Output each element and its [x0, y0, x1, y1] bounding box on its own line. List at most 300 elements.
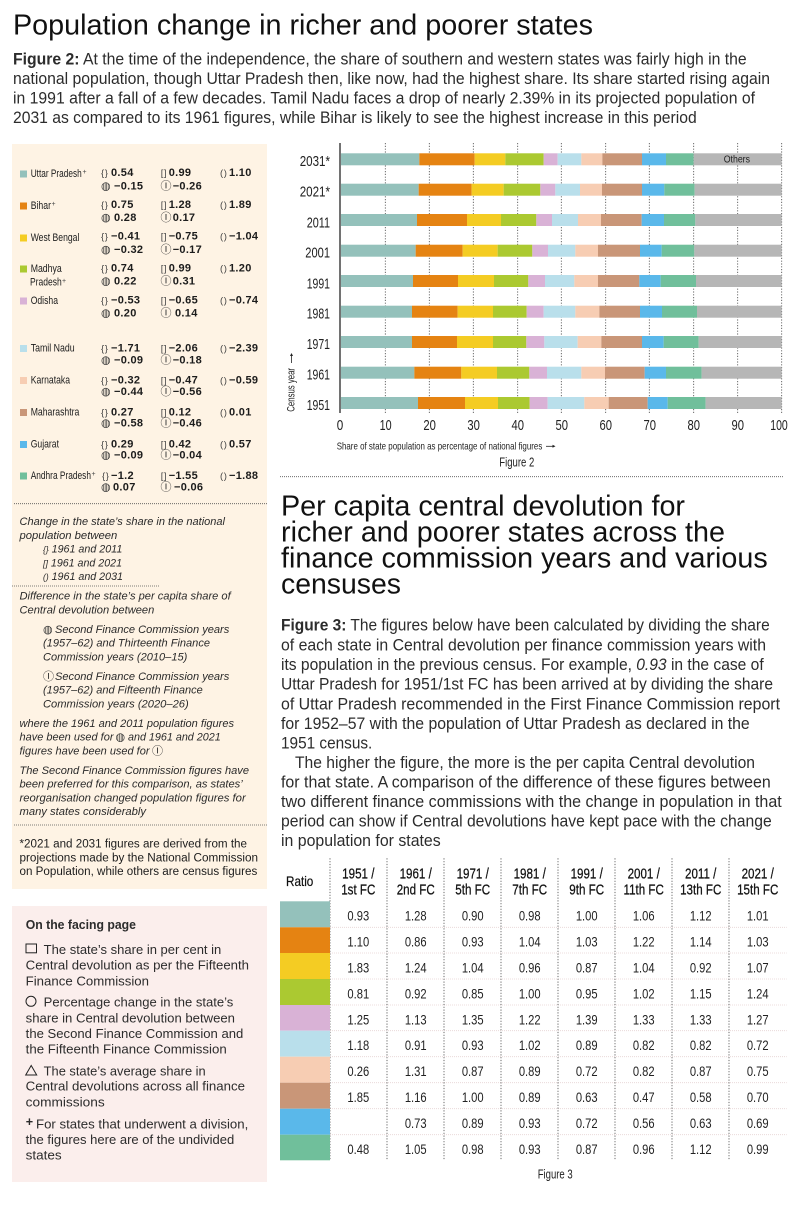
bar: 2001: [341, 245, 782, 257]
legend row: Tamil Nadu: Tamil Nadu: [31, 342, 75, 354]
legend row: Odisha: Odisha: [31, 295, 59, 307]
note: difference in per capita share: been preferred for this comparison, as states’: [20, 779, 243, 791]
column: 2011 / 13th FC: 0.63: [690, 1116, 712, 1131]
column: 2011 / 13th FC: [680, 865, 721, 1157]
note: difference in per capita share: reorganisation changed population figures for: [20, 792, 247, 804]
x axis numbers: 80: [687, 417, 700, 434]
panel: on the facing page: [12, 906, 267, 1182]
legend row: Gujarat: ◍: [101, 448, 111, 461]
legend row: Gujarat: −0.09: [114, 449, 143, 461]
column: 1961 / 2nd FC: 1.31: [405, 1064, 427, 1079]
legend row: Andhra Pradesh: Andhra Pradesh: [31, 470, 91, 482]
column: 2011 / 13th FC: 1.15: [690, 986, 712, 1002]
legend row: Karnataka: (): [220, 376, 228, 387]
column: 2021 / 15th FC: 0.72: [747, 1038, 769, 1054]
legend row: Maharashtra: 0.27: [111, 406, 134, 418]
legend row: Gujarat: [20, 438, 252, 461]
text block: figure 3 description: for that state. A comparison of the difference of these figures between: [281, 774, 771, 792]
legend row: West Bengal: (): [220, 232, 228, 243]
column: 1981 / 7th FC: 1.02: [519, 1038, 541, 1054]
column: 1991 / 9th FC: 0.63: [576, 1090, 598, 1105]
legend row: Gujarat: 0.29: [111, 438, 134, 450]
text block: figure 3 description: for 1952–57 with the population of Uttar Pradesh as declared in the: [281, 715, 750, 733]
y axis title with arrow: Census year: [286, 368, 298, 412]
colour swatches: [280, 901, 330, 1160]
text block: figure 3 description: in population for states: [281, 832, 441, 850]
bar: 1971: [341, 336, 782, 348]
year labels: 2001: [305, 245, 330, 262]
column: 1971 / 5th FC: 0.87: [462, 1064, 484, 1079]
column: 1971 / 5th FC: 1.00: [462, 1090, 484, 1105]
year labels: 1991: [307, 275, 330, 292]
text: average share: [26, 1064, 245, 1110]
column: 1991 / 9th FC: 0.95: [576, 986, 598, 1002]
legend row: Tamil Nadu: ◍: [101, 353, 111, 366]
column: 2011 / 13th FC: 1.33: [690, 1012, 712, 1028]
column: 1971 / 5th FC: 0.89: [462, 1116, 484, 1131]
text: share in devolution: The state’s share in per cent in: [44, 943, 221, 957]
text: undivided states: states: [26, 1148, 62, 1162]
column: 2021 / 15th FC: 0.75: [747, 1064, 769, 1079]
legend row: Karnataka: −0.47: [169, 375, 198, 387]
column: 1951 / 1st FC: 1st FC: [341, 881, 375, 898]
legend row: Andhra Pradesh: −1.2: [111, 470, 134, 482]
note: difference in per capita share: many states considerably: [20, 806, 147, 818]
legend row: Karnataka: [20, 374, 258, 398]
legend row: Uttar Pradesh: 1.10: [229, 167, 252, 179]
text block: figure 3 description: The higher the figure, the more is the per capita Central devolution: [295, 754, 755, 772]
legend row: Gujarat: 0.42: [169, 438, 191, 450]
column: 1971 / 5th FC: 1.04: [462, 960, 484, 976]
column: 1951 / 1st FC: 0.81: [347, 986, 369, 1002]
bar: 1951: [341, 397, 782, 409]
text: percentage change: the Fifteenth Finance Commission: [26, 1043, 227, 1057]
legend row: Tamil Nadu: {}: [101, 344, 109, 355]
legend row: Andhra Pradesh: {}: [102, 471, 110, 482]
column: 1951 / 1st FC: 1.18: [347, 1038, 369, 1054]
axis line: [339, 143, 341, 413]
title: population change: Population change in richer and poorer states: [13, 10, 593, 42]
legend row: Uttar Pradesh: 0.54: [111, 167, 134, 179]
column: 2021 / 15th FC: 0.70: [747, 1090, 769, 1105]
legend row: Gujarat: {}: [101, 439, 109, 450]
column: 1961 / 2nd FC: 0.73: [405, 1116, 427, 1131]
column: 2021 / 15th FC: 0.99: [747, 1142, 769, 1157]
column: 2001 / 11th FC: 0.96: [633, 1142, 655, 1157]
column: 2021 / 15th FC: 1.27: [747, 1012, 769, 1028]
x axis numbers: [337, 417, 788, 434]
text: percentage change: the Second Finance Commission and: [26, 1027, 243, 1041]
legend row: Madhya Pradesh: Pradesh: [30, 276, 62, 288]
note: difference in per capita share: Ⓘ: [152, 744, 163, 757]
text: undivided states: the figures here are of the undivided: [26, 1133, 234, 1147]
table: ratio by finance commission: [280, 858, 787, 1161]
legend row: Karnataka: −0.44: [114, 386, 144, 398]
legend row: West Bengal: −0.75: [169, 231, 198, 243]
legend row: Andhra Pradesh: []: [161, 471, 167, 482]
text block: figure 2 description: in 1991 after a fall of a few decades. Tamil Nadu faces a drop of nearly 2.39% in its projected population of: [13, 90, 755, 108]
legend row: Andhra Pradesh: [20, 470, 258, 493]
legend row: Madhya Pradesh: ◍: [101, 275, 111, 288]
legend row: Bihar: (): [220, 200, 228, 211]
legend row: Karnataka: −0.32: [111, 375, 140, 387]
legend row: Karnataka: −0.59: [229, 375, 258, 387]
legend row: Karnataka: Karnataka: [31, 374, 71, 386]
column: 1961 / 2nd FC: 0.92: [405, 986, 427, 1002]
caption: figure 3: Figure 3: [538, 1166, 573, 1181]
legend row: Bihar: 0.17: [173, 212, 195, 224]
legend row: Uttar Pradesh: −0.15: [114, 180, 143, 192]
legend row: Gujarat: []: [161, 439, 167, 450]
x axis numbers: 70: [643, 417, 656, 434]
legend row: Tamil Nadu: −2.39: [229, 343, 258, 355]
text: average share: The state’s average share in: [44, 1064, 206, 1078]
column: 1961 / 2nd FC: 0.86: [405, 935, 427, 950]
column: 1971 / 5th FC: 0.93: [462, 1038, 484, 1054]
legend row: Uttar Pradesh: [20, 167, 252, 192]
note: difference in per capita share: Difference in the state’s per capita share of: [20, 590, 232, 602]
year labels: 1971: [307, 336, 330, 353]
note: difference in per capita share: (1957–62) and Thirteenth Finance: [43, 638, 210, 650]
legend row: Maharashtra: 0.12: [169, 406, 191, 418]
legend row: Maharashtra: Maharashtra: [31, 406, 80, 418]
note: difference in per capita share: (1957–62) and Fifteenth Finance: [43, 684, 203, 696]
legend row: Tamil Nadu: −2.06: [169, 343, 198, 355]
column: 1951 / 1st FC: 1951 /: [342, 865, 375, 882]
legend row: Bihar: Bihar: [31, 200, 51, 212]
legend row: West Bengal: −0.41: [111, 231, 140, 243]
column: 2011 / 13th FC: 0.87: [690, 1064, 712, 1079]
column: 2001 / 11th FC: 0.47: [633, 1090, 655, 1105]
column: 1971 / 5th FC: [455, 865, 490, 1157]
legend row: Bihar: [20, 199, 252, 224]
text block: figure 3 description: 1951 census.: [281, 734, 372, 752]
note: difference in per capita share: Second Finance Commission years: [55, 671, 230, 683]
legend row: Gujarat: 0.57: [229, 438, 252, 450]
column: 1981 / 7th FC: 0.93: [519, 1116, 541, 1131]
legend row: Maharashtra: (): [220, 407, 228, 418]
legend row: Odisha: (): [220, 295, 228, 306]
column: 2001 / 11th FC: 1.06: [633, 909, 655, 924]
legend row: Odisha: 0.14: [175, 307, 198, 319]
legend row: Andhra Pradesh: (): [220, 471, 228, 482]
column: 1981 / 7th FC: 1.00: [519, 986, 541, 1002]
legend row: Maharashtra: 0.01: [229, 406, 252, 418]
column: 2021 / 15th FC: [737, 865, 778, 1157]
legend row: Madhya Pradesh: +: [62, 278, 66, 285]
text: share in devolution: Central devolution as per the Fifteenth: [26, 958, 249, 972]
year labels: 2011: [307, 214, 330, 231]
legend row: Odisha: Ⓘ: [160, 306, 172, 319]
legend row: Maharashtra: −0.46: [173, 418, 202, 430]
x axis numbers: 100: [770, 417, 788, 434]
column: 1951 / 1st FC: 0.48: [347, 1142, 369, 1157]
column: 2021 / 15th FC: 0.69: [747, 1116, 769, 1131]
legend row: Madhya Pradesh: 0.22: [114, 276, 137, 288]
column: 1981 / 7th FC: 0.89: [519, 1064, 541, 1079]
text block: figure 2 description: national population, though Uttar Pradesh then, like now, had the highest share. Its share started rising again: [13, 70, 770, 88]
column: 2001 / 11th FC: 1.22: [633, 935, 655, 950]
note: difference in per capita share: and 1961 and 2021: [128, 732, 221, 744]
text: percentage change: share in Central devolution between: [26, 1011, 235, 1025]
legend row: Bihar: Ⓘ: [160, 211, 172, 224]
column: 2011 / 13th FC: 2011 /: [685, 865, 717, 882]
note: change in population share: [19, 516, 225, 583]
note: difference in per capita share: Central devolution between: [20, 604, 154, 616]
column: 1961 / 2nd FC: 1.24: [405, 960, 427, 976]
column: 1951 / 1st FC: 1.10: [347, 935, 369, 950]
legend row: Bihar: 0.75: [111, 199, 134, 211]
x axis numbers: 20: [423, 417, 436, 434]
legend row: West Bengal: Ⓘ: [160, 243, 172, 256]
legend row: Bihar: 1.89: [229, 199, 252, 211]
legend row: West Bengal: −1.04: [229, 231, 259, 243]
note: difference in per capita share: Second Finance Commission years: [55, 624, 230, 636]
legend row: Madhya Pradesh: 0.74: [111, 262, 134, 274]
text block: figure 2 description: [13, 51, 770, 127]
legend row: Odisha: 0.20: [114, 307, 137, 319]
column: 2011 / 13th FC: 0.58: [690, 1090, 712, 1105]
column: 2001 / 11th FC: 1.02: [633, 986, 655, 1002]
column: 1991 / 9th FC: 0.87: [576, 1142, 598, 1157]
column: 2011 / 13th FC: 1.14: [690, 935, 712, 950]
heading: per capita central devolution: finance commission years and various: [281, 543, 768, 575]
legend row: Tamil Nadu: Ⓘ: [160, 353, 172, 366]
column: 1981 / 7th FC: 1981 /: [514, 865, 546, 882]
legend row: Madhya Pradesh: 1.20: [229, 262, 252, 274]
legend row: Tamil Nadu: []: [161, 344, 167, 355]
legend row: Uttar Pradesh: Ⓘ: [160, 180, 172, 192]
x axis numbers: 40: [511, 417, 524, 434]
text block: figure 3 description: of each state in Central devolution per finance commission years with: [281, 636, 766, 654]
column: 1971 / 5th FC: 0.93: [462, 935, 484, 950]
table heading: ratio: Ratio: [286, 873, 313, 889]
note: change in population share: Change in the state’s share in the national: [20, 516, 225, 528]
legend row: Andhra Pradesh: +: [92, 471, 96, 478]
text block: figure 3 description: of Uttar Pradesh recommended in the First Finance Commission report: [281, 695, 780, 713]
year labels: 1981: [307, 305, 330, 322]
year labels: 1961: [307, 366, 330, 383]
year labels: [300, 153, 330, 414]
legend row: Uttar Pradesh: []: [161, 168, 167, 179]
text: share in devolution: Finance Commission: [26, 974, 149, 988]
column: 1961 / 2nd FC: 1961 /: [400, 865, 432, 882]
icon: circle: [26, 996, 36, 1006]
column: 2021 / 15th FC: 1.01: [747, 909, 769, 924]
text block: figure 3 description: its population in the previous census. For example, 0.93 in the case of: [281, 656, 764, 674]
note: difference in per capita share: Commission years (2020–26): [43, 698, 189, 710]
column: 1991 / 9th FC: 0.87: [576, 960, 598, 976]
column: 1961 / 2nd FC: [397, 865, 435, 1157]
legend row: Andhra Pradesh: 0.07: [113, 481, 136, 493]
note: difference in per capita share: ◍: [43, 623, 53, 636]
column: 1971 / 5th FC: 0.98: [462, 1142, 484, 1157]
bar: 1991: [341, 275, 782, 287]
legend row: Tamil Nadu: −1.71: [111, 343, 140, 355]
text: average share: Central devolutions across all finance: [26, 1080, 245, 1094]
legend row: Maharashtra: −0.58: [114, 418, 143, 430]
legend row: Odisha: []: [161, 295, 167, 306]
year labels: 2021*: [300, 184, 330, 201]
icon: square: [26, 944, 36, 953]
caption: figure 2: Figure 2: [499, 455, 534, 470]
column: 2021 / 15th FC: 1.03: [747, 935, 769, 950]
legend row: Madhya Pradesh: 0.31: [173, 276, 195, 288]
x axis numbers: 30: [467, 417, 480, 434]
note: difference in per capita share: figures have been used for: [20, 745, 151, 757]
note: difference in per capita share: The Second Finance Commission figures have: [20, 765, 249, 777]
legend row: West Bengal: ◍: [101, 243, 111, 256]
legend row: Karnataka: []: [161, 376, 167, 387]
column: 2001 / 11th FC: 1.04: [633, 960, 655, 976]
text: undivided states: +: [26, 1115, 33, 1129]
column: 2011 / 13th FC: 1.12: [690, 909, 712, 924]
note: difference in per capita share: ◍: [116, 731, 125, 744]
x axis numbers: 50: [555, 417, 568, 434]
heading: per capita central devolution: [281, 491, 768, 601]
legend row: Gujarat: −0.04: [173, 449, 203, 461]
column: 1951 / 1st FC: 0.26: [347, 1064, 369, 1079]
column: 1951 / 1st FC: [341, 865, 375, 1157]
column: 2001 / 11th FC: [624, 865, 664, 1157]
footnote: projections: *2021 and 2031 figures are derived from the: [20, 838, 247, 850]
legend row: Bihar: 0.28: [114, 212, 137, 224]
legend row: Andhra Pradesh: Ⓘ: [160, 480, 172, 493]
column: 2001 / 11th FC: 2001 /: [628, 865, 660, 882]
column: 1991 / 9th FC: 0.72: [576, 1064, 598, 1079]
column: 1961 / 2nd FC: 1.05: [405, 1142, 427, 1157]
legend row: West Bengal: −0.32: [114, 244, 143, 256]
text: share in devolution: [26, 943, 249, 988]
column: 1951 / 1st FC: 1.25: [347, 1012, 369, 1028]
x axis numbers: 0: [337, 417, 343, 434]
column: 1951 / 1st FC: 0.93: [347, 909, 369, 924]
column: 1951 / 1st FC: 1.85: [347, 1090, 369, 1105]
note: difference in per capita share: where the 1961 and 2011 population figures: [20, 718, 234, 730]
legend row: Bihar: []: [161, 200, 167, 211]
column: 1981 / 7th FC: 0.98: [519, 909, 541, 924]
column: 1991 / 9th FC: [569, 865, 604, 1157]
legend row: Gujarat: Gujarat: [31, 438, 59, 450]
column: 1981 / 7th FC: 0.93: [519, 1142, 541, 1157]
column: 1991 / 9th FC: 0.89: [576, 1038, 598, 1054]
legend row: Odisha: −0.53: [111, 294, 140, 306]
column: 2001 / 11th FC: 0.82: [633, 1038, 655, 1054]
column: 1981 / 7th FC: 7th FC: [512, 881, 547, 898]
column: 1971 / 5th FC: 1971 /: [457, 865, 489, 882]
icon: triangle: [26, 1066, 37, 1075]
legend row: Odisha: [20, 294, 259, 319]
column: 2011 / 13th FC: 0.82: [690, 1038, 712, 1054]
column: 1991 / 9th FC: 9th FC: [569, 881, 604, 898]
text: average share: commissions: [26, 1096, 105, 1110]
legend row: West Bengal: {}: [101, 232, 109, 243]
column: 1981 / 7th FC: 1.04: [519, 935, 541, 950]
column: 1961 / 2nd FC: 1.28: [405, 909, 427, 924]
heading: per capita central devolution: censuses: [281, 569, 401, 601]
legend row: Odisha: ◍: [101, 306, 111, 319]
legend row: Madhya Pradesh: {}: [101, 263, 109, 274]
column: 2001 / 11th FC: 1.33: [633, 1012, 655, 1028]
legend row: Maharashtra: Ⓘ: [160, 417, 172, 430]
heading: per capita central devolution: richer and poorer states across the: [281, 517, 725, 549]
x axis numbers: 90: [731, 417, 744, 434]
legend row: Uttar Pradesh: Uttar Pradesh: [31, 168, 82, 180]
column: 1961 / 2nd FC: 1.16: [405, 1090, 427, 1105]
column: 1991 / 9th FC: 1.39: [576, 1012, 598, 1028]
legend row: Maharashtra: ◍: [101, 417, 111, 430]
legend row: Bihar: {}: [101, 200, 109, 211]
text block: figure 3 description: period can show if Central devolutions have kept pace with the change: [281, 813, 772, 831]
note: difference in per capita share: Commission years (2010–15): [43, 651, 187, 663]
note: change in population share: [] 1961 and 2021: [42, 557, 122, 569]
legend row: Karnataka: {}: [101, 376, 109, 387]
column: 1971 / 5th FC: 1.35: [462, 1012, 484, 1028]
legend row: Karnataka: −0.56: [173, 386, 202, 398]
panel: state legend and notes: [12, 144, 267, 889]
column: 1951 / 1st FC: 1.83: [347, 960, 369, 976]
bar: 2031: [341, 153, 782, 165]
text: percentage change: Percentage change in the state’s: [44, 996, 233, 1010]
heading: per capita central devolution: Per capita central devolution for: [281, 491, 685, 523]
legend row: Bihar: +: [52, 201, 56, 208]
bar: 1961: [341, 367, 782, 379]
column: 1991 / 9th FC: 1.03: [576, 935, 598, 950]
legend row: Tamil Nadu: [20, 342, 258, 366]
note: difference in per capita share: Ⓘ: [43, 670, 54, 683]
bar: 2011: [341, 214, 782, 226]
text block: figure 2 description: 2031 as compared to its 1961 figures, while Bihar is likely to see the highest increase in this period: [13, 109, 697, 127]
column: 1981 / 7th FC: [512, 865, 547, 1157]
legend row: Karnataka: Ⓘ: [160, 385, 172, 398]
legend row: Odisha: −0.74: [229, 294, 259, 306]
legend row: Gujarat: (): [220, 439, 228, 450]
legend row: West Bengal: []: [161, 232, 167, 243]
legend row: Madhya Pradesh: 0.99: [169, 262, 191, 274]
column: 1991 / 9th FC: 0.72: [576, 1116, 598, 1131]
label: others: Others: [724, 154, 750, 166]
column: 1961 / 2nd FC: 1.13: [405, 1012, 427, 1028]
note: change in population share: population between: [19, 530, 117, 542]
column: 1991 / 9th FC: 1.00: [576, 909, 598, 924]
year labels: 1951: [307, 397, 330, 414]
legend row: Uttar Pradesh: −0.26: [173, 180, 202, 192]
legend row: Tamil Nadu: −0.09: [114, 354, 143, 366]
text block: figure 3 description: Uttar Pradesh for 1951/1st FC has been arrived at by dividing the share: [281, 676, 773, 694]
column: 2001 / 11th FC: 0.56: [633, 1116, 655, 1131]
column: 1961 / 2nd FC: 0.91: [405, 1038, 427, 1054]
text block: figure 3 description: Figure 3: The figures below have been calculated by dividing the share: [281, 617, 770, 635]
legend row: Madhya Pradesh: [20, 262, 252, 288]
text block: figure 3 description: [281, 617, 782, 850]
legend row: Karnataka: ◍: [101, 385, 111, 398]
column: 2011 / 13th FC: 0.92: [690, 960, 712, 976]
footnote: projections: [20, 838, 258, 878]
legend row: Gujarat: Ⓘ: [160, 448, 172, 461]
column: 2021 / 15th FC: 15th FC: [737, 881, 778, 898]
legend row: Madhya Pradesh: Madhya: [31, 263, 62, 275]
column: 2021 / 15th FC: 2021 /: [742, 865, 774, 882]
legend row: Uttar Pradesh: 0.99: [169, 167, 191, 179]
legend row: Tamil Nadu: −0.18: [173, 354, 202, 366]
column: 2011 / 13th FC: 1.12: [690, 1142, 712, 1157]
legend row: Uttar Pradesh: (): [220, 168, 228, 179]
x axis title with arrow: Share of state population as percentage of national figures: [337, 440, 542, 452]
column: 1971 / 5th FC: 0.90: [462, 909, 484, 924]
column: 1961 / 2nd FC: 2nd FC: [397, 881, 435, 898]
column: 2021 / 15th FC: 1.24: [747, 986, 769, 1002]
column: 1991 / 9th FC: 1991 /: [571, 865, 603, 882]
